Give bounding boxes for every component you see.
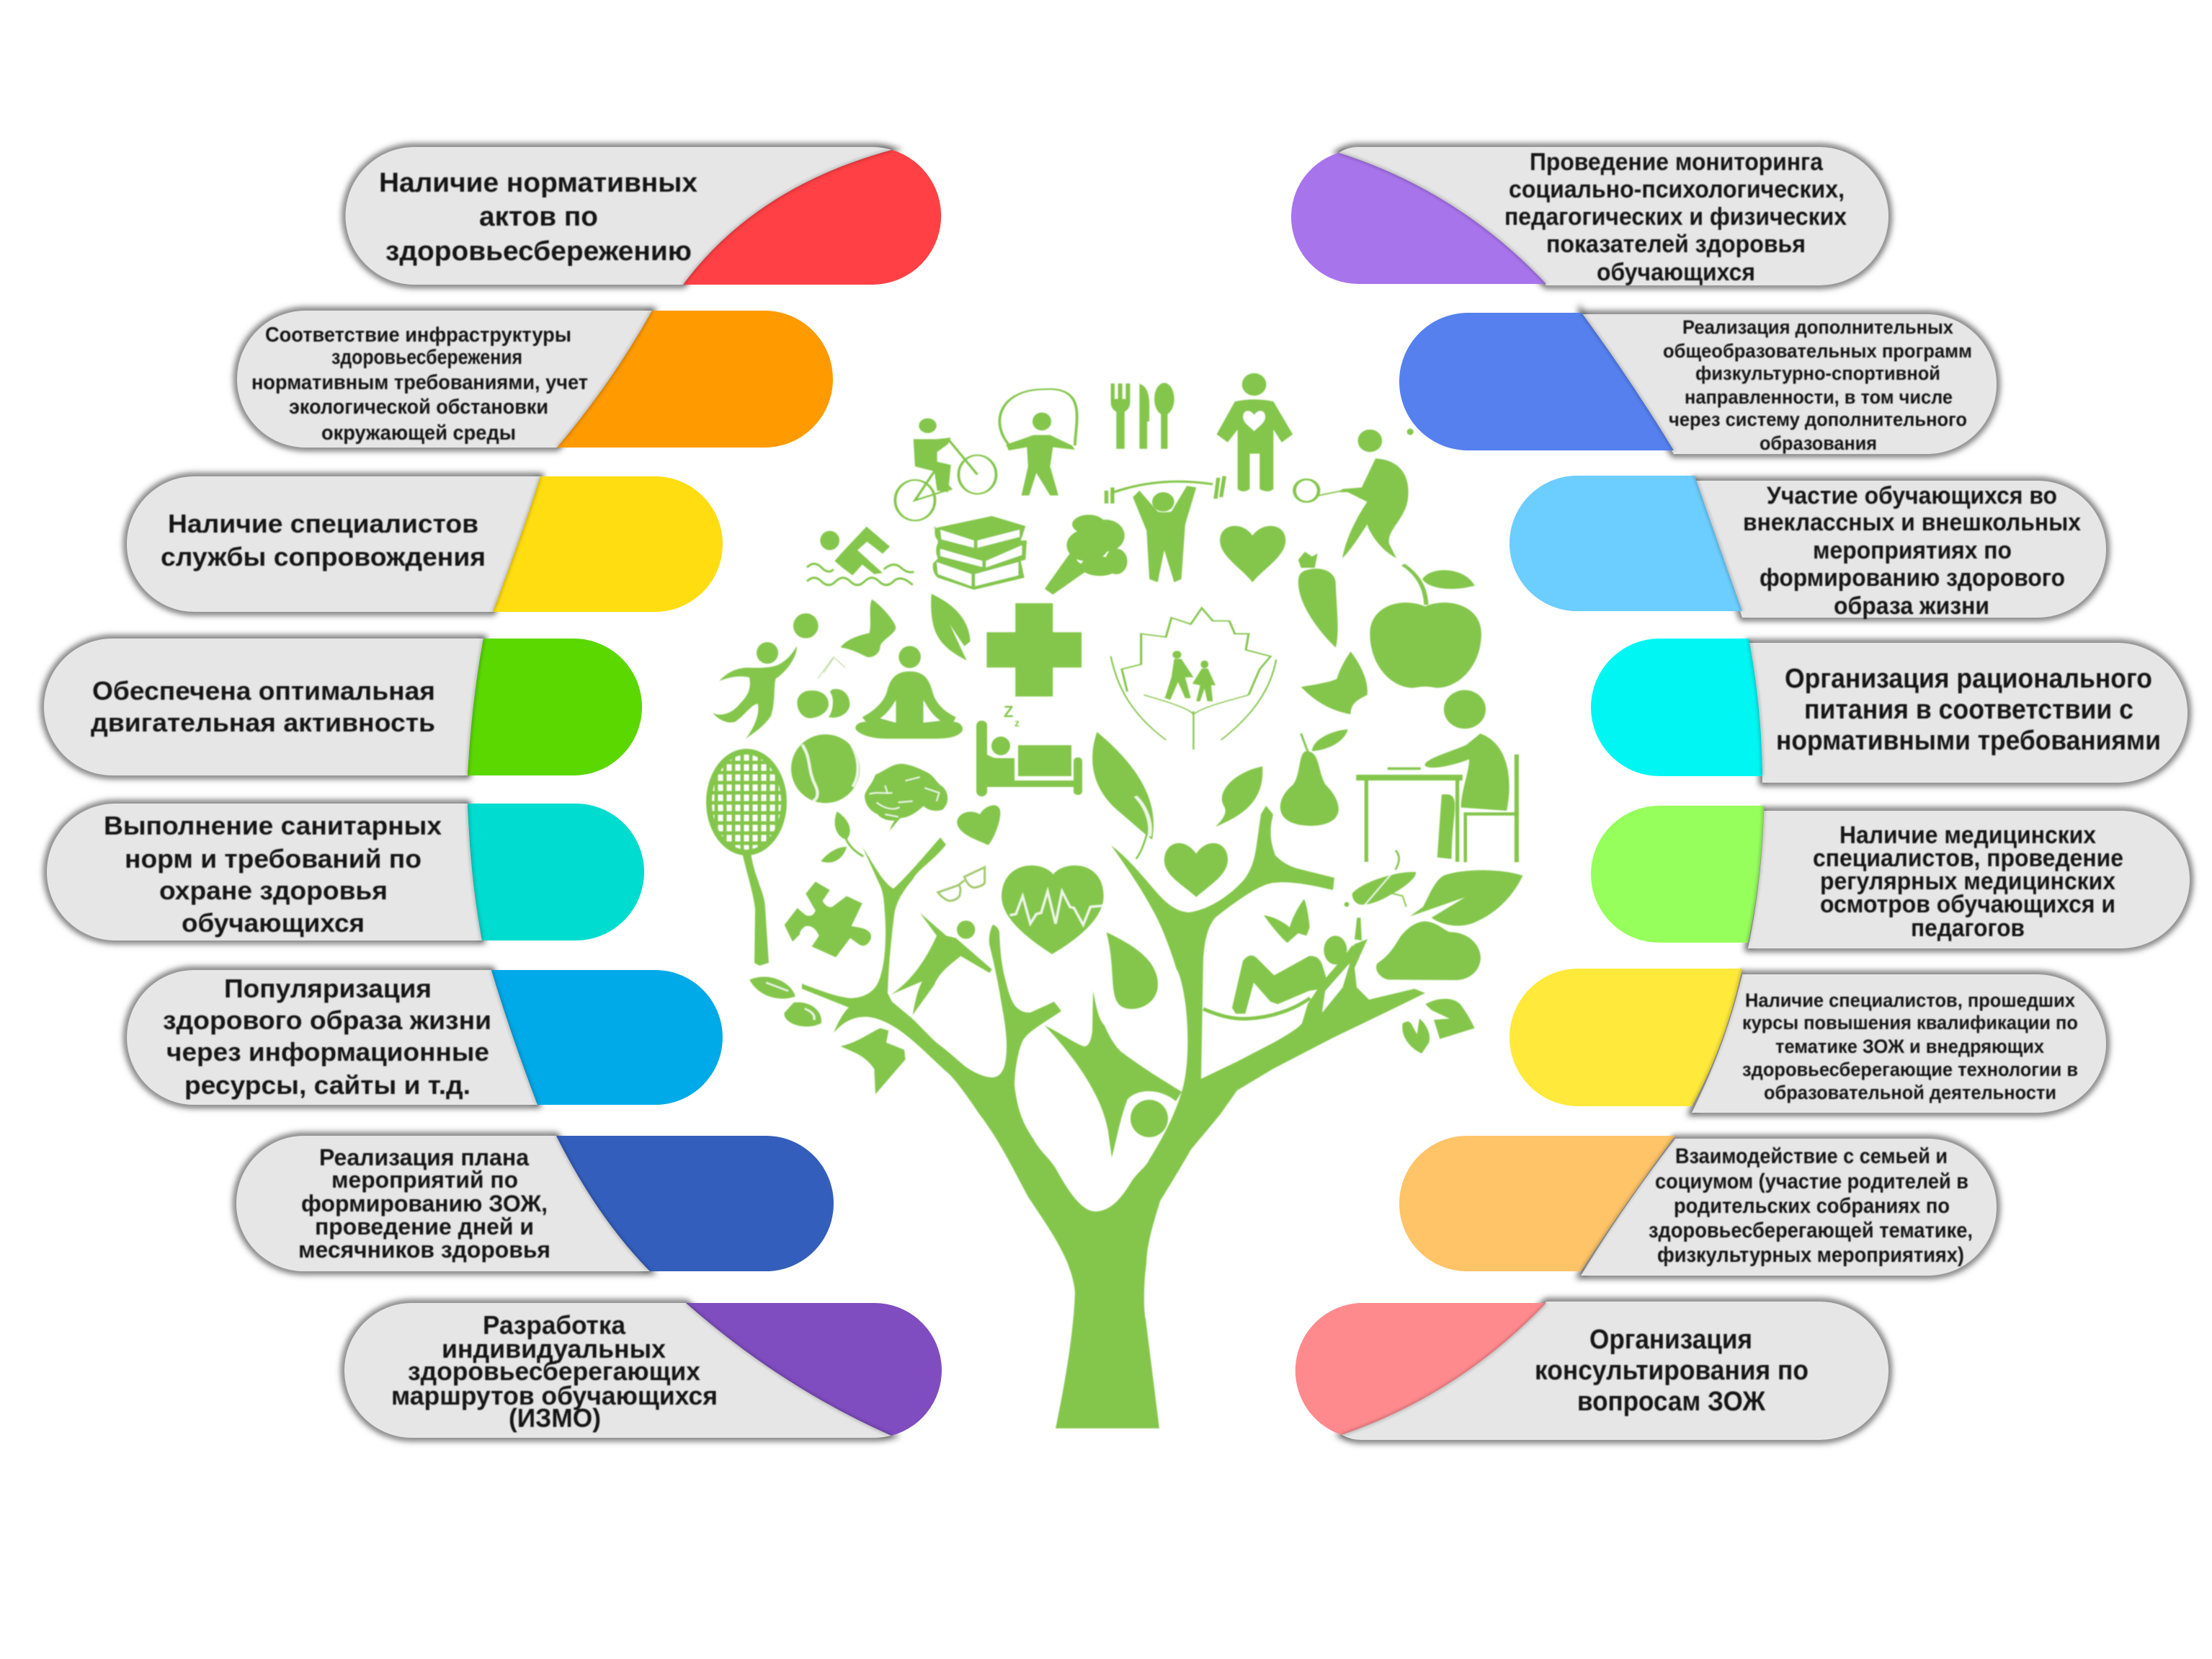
text: right pill 2: общеобразовательных программ bbox=[1663, 340, 1972, 362]
icon: butterfly small bbox=[1264, 899, 1310, 943]
tree details, left crop coordinates bbox=[785, 764, 1148, 1094]
text: right pill 4: Организация рационального bbox=[1785, 664, 2152, 694]
panel: right pill 5, light green bbox=[1591, 806, 2190, 948]
text: right pill 6: курсы повышения квалификации по bbox=[1742, 1012, 2078, 1033]
text: right pill 3: Участие обучающихся во bbox=[1767, 482, 2057, 510]
icon: big leaf right bbox=[1410, 870, 1522, 926]
icon: leaf upper bbox=[931, 594, 971, 661]
icon: carrot bbox=[1298, 552, 1338, 648]
text: right pill 4 bbox=[1776, 664, 2161, 756]
text: right pill 3: внеклассных и внешкольных bbox=[1743, 509, 2081, 536]
text: left pill 2: здоровьесбережения bbox=[331, 346, 522, 369]
icon: runner with ball bbox=[713, 613, 819, 739]
panel: left pill 8, purple bbox=[344, 1303, 942, 1438]
text: left pill 6 bbox=[163, 974, 491, 1100]
icon: butterfly lower left bbox=[841, 1028, 906, 1094]
icon: water drop bbox=[1107, 933, 1158, 1009]
text: right pill 4: нормативными требованиями bbox=[1776, 726, 2161, 756]
icon: leaf small bbox=[1216, 766, 1262, 827]
panel: right pill 8, pink bbox=[1295, 1302, 1888, 1440]
icon: cyclist bbox=[895, 418, 996, 520]
text: left pill 7: формированию ЗОЖ, bbox=[301, 1191, 548, 1217]
text: left pill 7 bbox=[298, 1144, 550, 1263]
text: right pill 5: осмотров обучающихся и bbox=[1820, 891, 2115, 918]
icon: glasses bbox=[938, 867, 985, 901]
icon: bed with sleeper: z bbox=[1014, 717, 1020, 729]
text: left pill 6: ресурсы, сайты и т.д. bbox=[184, 1070, 471, 1100]
text: left pill 8: здоровьесберегающих bbox=[408, 1356, 700, 1386]
icon: heart with pulse bbox=[1002, 866, 1104, 954]
text: right pill 7 bbox=[1649, 1144, 1973, 1267]
tree details, right crop coordinates bbox=[1203, 850, 1522, 1054]
text: left pill 3: Наличие специалистов bbox=[168, 509, 478, 538]
icon: stack of books bbox=[933, 516, 1027, 590]
icons, left crown crop coordinates bbox=[713, 516, 1027, 803]
tree trunk and branches bbox=[802, 806, 1425, 1428]
text: left pill 7: проведение дней и bbox=[315, 1214, 534, 1240]
text: left pill 2: Соответствие инфраструктуры bbox=[265, 324, 571, 347]
text: right pill 7: здоровьесберегающей тематике, bbox=[1649, 1219, 1973, 1242]
person in tree fork bbox=[1045, 991, 1182, 1157]
icon: apple bbox=[1370, 564, 1481, 688]
text: right pill 7: социумом (участие родителей в bbox=[1655, 1170, 1968, 1193]
text: right pill 1 bbox=[1504, 148, 1847, 286]
text: left pill 2 bbox=[251, 324, 588, 445]
text: left pill 2: нормативным требованиями, учет bbox=[251, 371, 588, 394]
text: left pill 8: маршрутов обучающихся bbox=[391, 1381, 718, 1410]
person leaping bbox=[891, 913, 992, 1015]
text: left pill 5: обучающихся bbox=[182, 908, 365, 938]
stem under large leaf bbox=[1136, 829, 1148, 859]
icon: leaves lower right bbox=[1402, 999, 1475, 1054]
icon: brain bbox=[865, 764, 947, 831]
text: left pill 2: экологической обстановки bbox=[289, 396, 548, 419]
text: right pill 3: формированию здорового bbox=[1760, 564, 2065, 592]
text: right pill 5: специалистов, проведение bbox=[1813, 845, 2123, 872]
text: right pill 8: вопросам ЗОЖ bbox=[1577, 1387, 1766, 1417]
icon: medical cross bbox=[986, 603, 1082, 696]
icon: person with heart bbox=[1217, 373, 1293, 492]
text: right pill 6 bbox=[1742, 989, 2078, 1103]
panel: left pill 6, blue bbox=[127, 970, 723, 1105]
text: right pill 2: Реализация дополнительных bbox=[1682, 316, 1953, 338]
text: left pill 2: окружающей среды bbox=[321, 422, 516, 445]
text: right pill 1: показателей здоровья bbox=[1546, 231, 1806, 258]
chart: health tree with icons bbox=[706, 373, 1522, 1428]
icon: butterfly upper left bbox=[841, 600, 896, 657]
icon: small heart bbox=[957, 805, 1000, 845]
icon: weightlifter bbox=[1107, 476, 1224, 582]
text: right pill 2 bbox=[1663, 316, 1972, 454]
icon: tennis ball bbox=[791, 734, 860, 803]
panel: left pill 5, teal bbox=[47, 804, 644, 940]
text: left pill 3 bbox=[161, 509, 486, 571]
text: right pill 3: образа жизни bbox=[1834, 592, 1989, 620]
plant sprig bbox=[821, 811, 863, 863]
text: right pill 1: обучающихся bbox=[1597, 259, 1755, 286]
icon: bed with sleeper: Z bbox=[1004, 703, 1013, 721]
text: left pill 5: охране здоровья bbox=[159, 876, 388, 905]
text: left pill 5: Выполнение санитарных bbox=[104, 811, 442, 840]
text: left pill 6: через информационные bbox=[166, 1037, 489, 1067]
icon: broccoli bbox=[1045, 515, 1128, 595]
icon: meditating person bbox=[855, 646, 963, 739]
text: left pill 7: Реализация плана bbox=[319, 1144, 529, 1170]
text: right pill 8 bbox=[1535, 1325, 1809, 1417]
text: right pill 6: Наличие специалистов, прошедших bbox=[1745, 989, 2075, 1011]
text: right pill 6: образовательной деятельности bbox=[1764, 1082, 2056, 1103]
text: right pill 4: питания в соответствии с bbox=[1804, 695, 2133, 725]
text: left pill 7: месячников здоровья bbox=[298, 1237, 550, 1263]
panel: left pill 4, green bbox=[44, 639, 642, 775]
text: left pill 6: Популяризация bbox=[224, 974, 432, 1003]
panel: left pill 1, red bbox=[346, 147, 941, 285]
icon: leaves lower left bbox=[749, 977, 821, 1026]
icon: cherries bbox=[797, 657, 849, 719]
text: right pill 2: направленности, в том числе bbox=[1685, 386, 1953, 408]
icon: large leaf bbox=[1092, 732, 1154, 840]
icon: pear bbox=[1280, 729, 1348, 826]
panel: right pill 6, yellow bbox=[1509, 969, 2106, 1113]
text: left pill 4 bbox=[91, 676, 435, 737]
icon: heart in fork bbox=[1164, 843, 1228, 897]
text: right pill 8: Организация bbox=[1589, 1325, 1752, 1355]
icon: heart centre bbox=[1220, 526, 1285, 582]
text: right pill 2: образования bbox=[1760, 432, 1877, 454]
text: left pill 5 bbox=[104, 811, 442, 938]
icon: fork knife spoon bbox=[1111, 383, 1174, 449]
panel: right pill 1, violet bbox=[1291, 147, 1888, 286]
text: left pill 4: двигательная активность bbox=[91, 708, 435, 737]
text: left pill 8: (ИЗМО) bbox=[509, 1403, 601, 1433]
icon: jump rope figure bbox=[999, 389, 1077, 495]
text: left pill 1: Наличие нормативных bbox=[379, 168, 697, 198]
text: right pill 2: физкультурно-спортивной bbox=[1695, 363, 1940, 384]
panel: right pill 3, sky blue bbox=[1509, 476, 2106, 620]
text: left pill 8: индивидуальных bbox=[442, 1334, 666, 1364]
text: left pill 7: мероприятий по bbox=[331, 1167, 518, 1193]
text: right pill 1: Проведение мониторинга bbox=[1530, 148, 1824, 176]
text: left pill 8 bbox=[391, 1310, 718, 1433]
text: right pill 3: мероприятиях по bbox=[1813, 537, 2012, 564]
text: right pill 8: консультирования по bbox=[1535, 1356, 1809, 1386]
panel: left pill 3, yellow bbox=[127, 476, 723, 612]
text: right pill 6: здоровьесберегающие технологии в bbox=[1742, 1059, 2078, 1080]
text: right pill 7: родительских собраниях по bbox=[1674, 1194, 1950, 1218]
panel: right pill 7, light orange bbox=[1399, 1136, 1997, 1276]
text: right pill 6: тематике ЗОЖ и внедряющих bbox=[1775, 1036, 2044, 1057]
text: left pill 5: норм и требований по bbox=[125, 844, 422, 873]
icon: emblem, hands holding tree and children bbox=[1111, 608, 1276, 750]
text: right pill 1: социально-психологических, bbox=[1509, 176, 1845, 203]
icon: puzzle piece bbox=[785, 881, 871, 957]
text: left pill 6: здорового образа жизни bbox=[163, 1005, 491, 1035]
panel: left pill 7, dark blue bbox=[236, 1136, 834, 1271]
text: right pill 2: через систему дополнительного bbox=[1669, 409, 1967, 430]
person in hammock bbox=[1203, 917, 1362, 1019]
text: right pill 5: педагогов bbox=[1911, 915, 2025, 942]
text: left pill 4: Обеспечена оптимальная bbox=[92, 676, 435, 706]
text: left pill 1: актов по bbox=[479, 202, 598, 232]
text: left pill 1 bbox=[379, 168, 697, 267]
icon: swimmer bbox=[807, 527, 914, 585]
icon: tennis player bbox=[1294, 429, 1414, 559]
text: right pill 5: регулярных медицинских bbox=[1820, 868, 2115, 895]
text: right pill 5: Наличие медицинских bbox=[1839, 822, 2096, 849]
panel: left pill 2, orange bbox=[237, 311, 833, 448]
icon: beetle bbox=[1344, 850, 1416, 907]
text: right pill 7: физкультурных мероприятиях) bbox=[1657, 1243, 1964, 1267]
icon: bed with sleeper bbox=[976, 703, 1082, 796]
text: left pill 8: Разработка bbox=[483, 1310, 626, 1340]
panel: right pill 2, blue bbox=[1399, 313, 1997, 454]
icon: student at desk bbox=[1356, 690, 1519, 862]
panel: right pill 4, cyan bbox=[1591, 639, 2188, 783]
text: right pill 5 bbox=[1813, 822, 2123, 942]
icon: butterfly right bbox=[1301, 651, 1368, 714]
text: right pill 7: Взаимодействие с семьей и bbox=[1675, 1144, 1948, 1168]
text: right pill 1: педагогических и физических bbox=[1504, 203, 1847, 231]
icon: tennis racket bbox=[706, 750, 787, 966]
text: left pill 3: службы сопровождения bbox=[161, 542, 486, 571]
icon: cloud bbox=[1376, 921, 1481, 980]
text: left pill 1: здоровьесбережению bbox=[385, 236, 692, 267]
text: right pill 3 bbox=[1743, 482, 2081, 620]
